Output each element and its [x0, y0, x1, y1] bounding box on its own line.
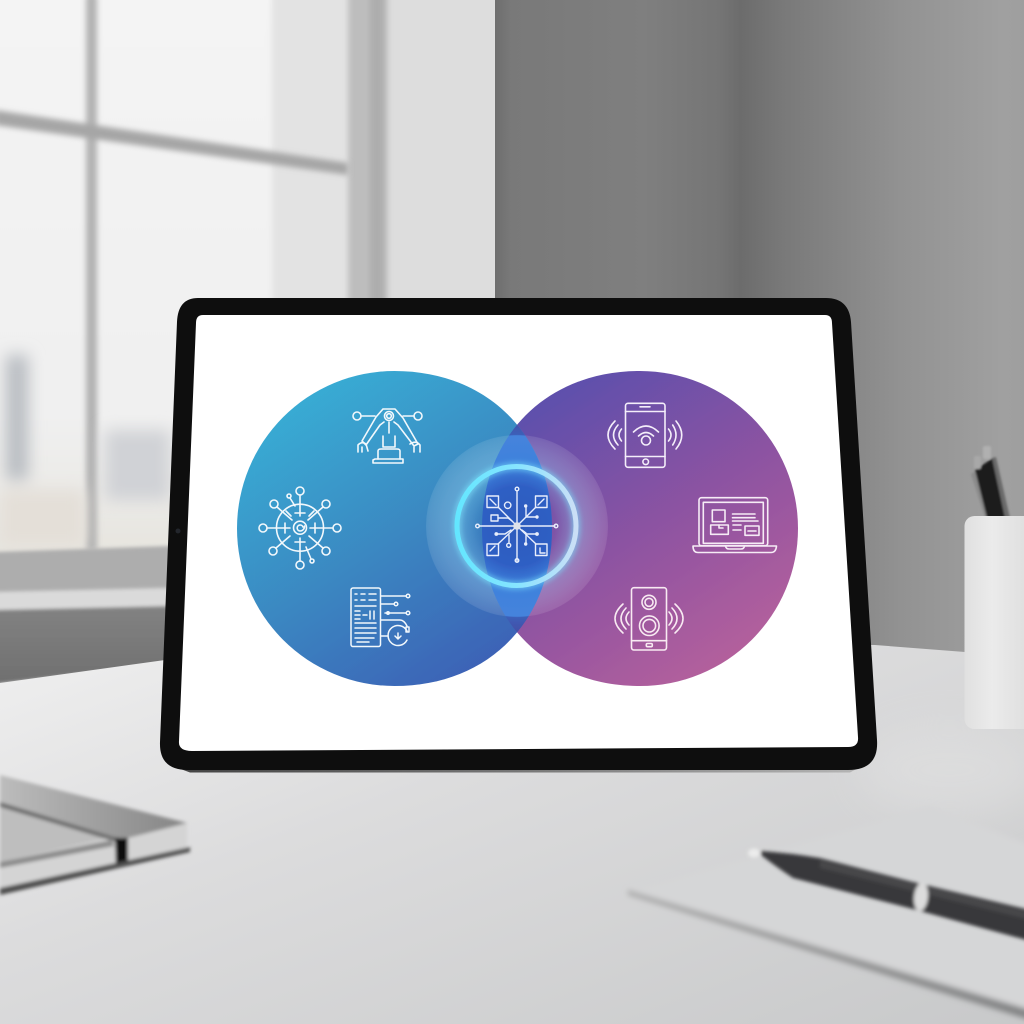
tablet [160, 298, 877, 772]
overlap lens [482, 424, 552, 632]
left circle [237, 371, 552, 686]
icon: robot arm [353, 409, 422, 463]
desk surface [0, 640, 1024, 1024]
tablet screen [179, 315, 858, 751]
tablet edge highlight [178, 766, 862, 772]
distant city [0, 355, 170, 545]
icon: code document with gear [351, 588, 410, 646]
desk highlight [860, 725, 1024, 815]
central glow halo [426, 435, 608, 617]
venn diagram [237, 371, 798, 686]
icon: smartphone with wifi [608, 403, 682, 467]
pen cup [964, 446, 1024, 729]
camera dot [176, 528, 180, 534]
paper on desk [628, 806, 1024, 1020]
glowing ring [457, 466, 576, 586]
icon: laptop dashboard [693, 498, 776, 552]
right circle [482, 371, 798, 686]
notebook [0, 775, 190, 895]
window mullions [0, 0, 348, 550]
icon: neural gear network [259, 487, 341, 569]
background: grey wall [495, 0, 1024, 665]
icon: smart speaker [615, 588, 683, 650]
window sill [0, 546, 170, 684]
background: window wall [0, 0, 500, 690]
icon: central network hub [476, 487, 558, 562]
pen on desk [748, 848, 1024, 941]
tablet bezel [160, 298, 877, 770]
pens [971, 446, 1010, 518]
